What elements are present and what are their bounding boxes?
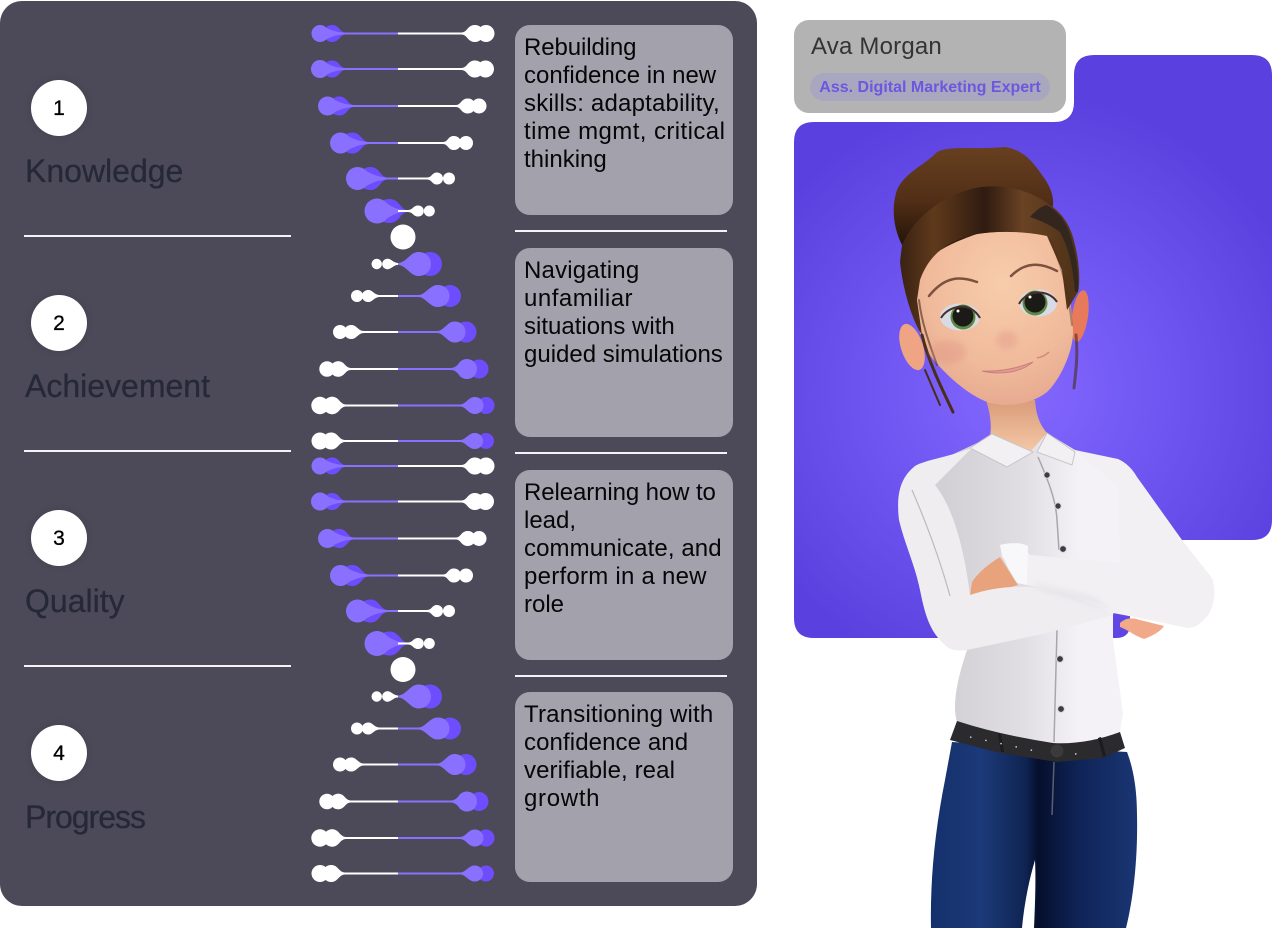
trousers: [931, 742, 1137, 928]
text card 1: thinking: [524, 146, 607, 173]
collar: [970, 433, 1075, 467]
text card 1: time mgmt, critical: [524, 118, 725, 145]
text card 3: communicate, and: [524, 535, 722, 562]
text card 2: situations with: [524, 313, 675, 340]
step 1 badge: 1: [53, 97, 65, 120]
step 2 label: Achievement: [25, 368, 210, 404]
nose: [996, 331, 1018, 349]
mouth: [982, 362, 1033, 373]
ear right: [1068, 289, 1092, 343]
step 3 badge: [31, 510, 87, 566]
left hand: [970, 557, 1018, 596]
step 2 badge: [31, 295, 87, 351]
shirt buttons: [1044, 472, 1066, 712]
step 1 badge: [31, 80, 87, 136]
step 4 label: Progress: [25, 799, 145, 835]
front hair: [900, 186, 1079, 335]
text card 3: Relearning how to: [524, 479, 716, 506]
hair wisps: [919, 240, 1077, 412]
text card 3: perform in a new: [524, 563, 707, 590]
text card 1: Rebuilding: [524, 34, 636, 61]
step 2 badge: 2: [53, 312, 65, 335]
chart: double helix: [311, 25, 494, 882]
eyebrows: [929, 265, 1057, 296]
back hair: [905, 205, 1078, 330]
text card 4: verifiable, real: [524, 757, 675, 784]
arm: shoulder to elbow and lower forearm: [898, 448, 1113, 650]
text card 1: confidence in new: [524, 62, 716, 89]
neck: [985, 398, 1047, 452]
hair bun: [894, 147, 1053, 245]
helix upper half: [311, 25, 494, 450]
torso: [922, 433, 1125, 743]
belt: [950, 721, 1125, 762]
text card 4: growth: [524, 785, 600, 812]
text card 2: Navigating: [524, 257, 639, 284]
eye right: [1019, 290, 1057, 316]
text card 3: lead,: [524, 507, 576, 534]
step 1 label: Knowledge: [25, 153, 183, 189]
step 3 badge: 3: [53, 527, 65, 550]
text card 1: [515, 25, 733, 215]
ear left: [894, 321, 930, 373]
text card 4: Transitioning with: [524, 701, 713, 728]
helix lower half: [311, 458, 494, 882]
arm: upper sleeve and forearm: [1000, 450, 1214, 628]
card: profile name: [794, 20, 1066, 113]
text card 2: [515, 248, 733, 437]
name: Ava Morgan: [811, 33, 942, 60]
step 4 badge: 4: [53, 742, 65, 765]
role pill: [810, 73, 1050, 101]
placket: [1038, 457, 1059, 742]
backdrop shape: [794, 55, 1272, 638]
role pill: Ass. Digital Marketing Expert: [819, 79, 1041, 96]
face: [917, 232, 1073, 405]
step 4 badge: [31, 725, 87, 781]
text card 3: [515, 470, 733, 660]
text card 2: unfamiliar: [524, 285, 633, 312]
character: [894, 147, 1214, 928]
text card 1: skills: adaptability,: [524, 90, 720, 117]
step 3 label: Quality: [25, 583, 125, 619]
text card 4: [515, 692, 733, 882]
braid: [1030, 205, 1078, 292]
text card 4: confidence and: [524, 729, 688, 756]
hand behind arm: [1120, 618, 1164, 639]
eye left: [940, 304, 980, 330]
cheek blush: [930, 340, 966, 364]
text card 3: role: [524, 591, 564, 618]
panel: dark background: [0, 1, 757, 906]
text card 2: guided simulations: [524, 341, 723, 368]
